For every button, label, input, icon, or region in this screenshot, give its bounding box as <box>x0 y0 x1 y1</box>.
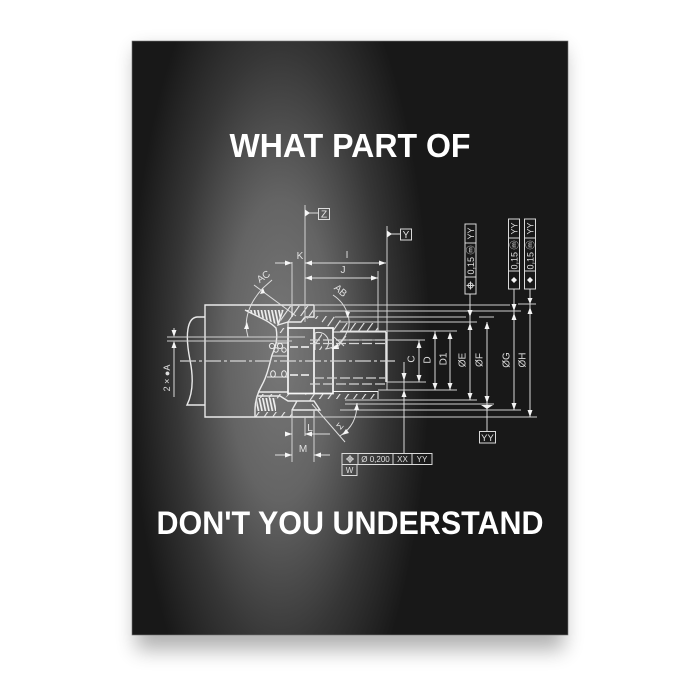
tolerance frame 2 <box>508 219 520 289</box>
position tolerance frame: YY <box>417 455 428 464</box>
hatched sections <box>255 306 378 417</box>
tolerance frame 1: 0,15 ⓜ <box>466 245 476 275</box>
title: bottom line: DON'T YOU UNDERSTAND <box>156 505 544 541</box>
dimensions I J K: J <box>340 265 346 276</box>
position tolerance frame <box>342 454 432 476</box>
tolerance frame 1: YY <box>466 227 476 240</box>
dimensions I J K <box>275 250 386 280</box>
lower angle marker: Σ <box>334 420 346 431</box>
diameter dimensions: D <box>422 356 434 364</box>
inner bore <box>288 328 386 399</box>
datum Y: Y <box>403 230 410 241</box>
poster shadow <box>136 50 564 650</box>
part body outline <box>187 305 320 417</box>
lower angle marker <box>312 403 359 442</box>
extension lines <box>167 205 537 462</box>
half circle detail <box>314 332 329 350</box>
diameter dimensions: ØG <box>502 352 512 368</box>
poster background <box>132 41 568 635</box>
diameter dimensions <box>402 289 532 453</box>
dimensions L M: M <box>299 444 307 455</box>
technical drawing <box>162 205 537 476</box>
dashed axes and hidden lines <box>180 340 395 384</box>
dimension 2 x A: 2 × ●A <box>162 365 172 391</box>
datum YY: YY <box>481 433 494 444</box>
dimensions I J K: K <box>297 251 304 262</box>
angle AC <box>244 269 296 337</box>
datum Z: Z <box>321 210 327 220</box>
datum YY <box>480 432 496 444</box>
diameter dimensions: C <box>406 355 418 363</box>
dimensions L M <box>275 423 330 458</box>
title: top line: WHAT PART OF <box>230 127 470 164</box>
datum Z <box>305 208 330 220</box>
tolerance frame 3: 0,15 ⓜ <box>526 240 536 270</box>
tolerance frame 1 <box>465 224 476 294</box>
angle AB <box>325 283 350 349</box>
position tolerance frame: W <box>346 466 354 475</box>
threads <box>246 310 283 411</box>
internal detail <box>267 343 288 377</box>
dimension 2 x A <box>162 328 176 397</box>
datum Y <box>387 229 412 241</box>
dimensions I J K: I <box>346 250 348 261</box>
tolerance frame 3: YY <box>526 222 536 235</box>
tolerance frame 2: 0,15 ⓜ <box>510 240 520 270</box>
tolerance frame 2: YY <box>510 222 520 235</box>
diameter dimensions: ØF <box>474 353 486 367</box>
diameter dimensions: ØE <box>458 352 468 367</box>
angle AB: AB <box>331 283 349 300</box>
tolerance frame 3 <box>524 219 536 289</box>
dimensions L M: L <box>307 423 313 434</box>
angle AC: AC <box>255 269 273 286</box>
diameter dimensions: ØH <box>518 352 528 368</box>
position tolerance frame: Ø 0,200 <box>361 455 390 464</box>
diameter dimensions: D1 <box>438 352 450 365</box>
position tolerance frame: XX <box>397 455 408 464</box>
